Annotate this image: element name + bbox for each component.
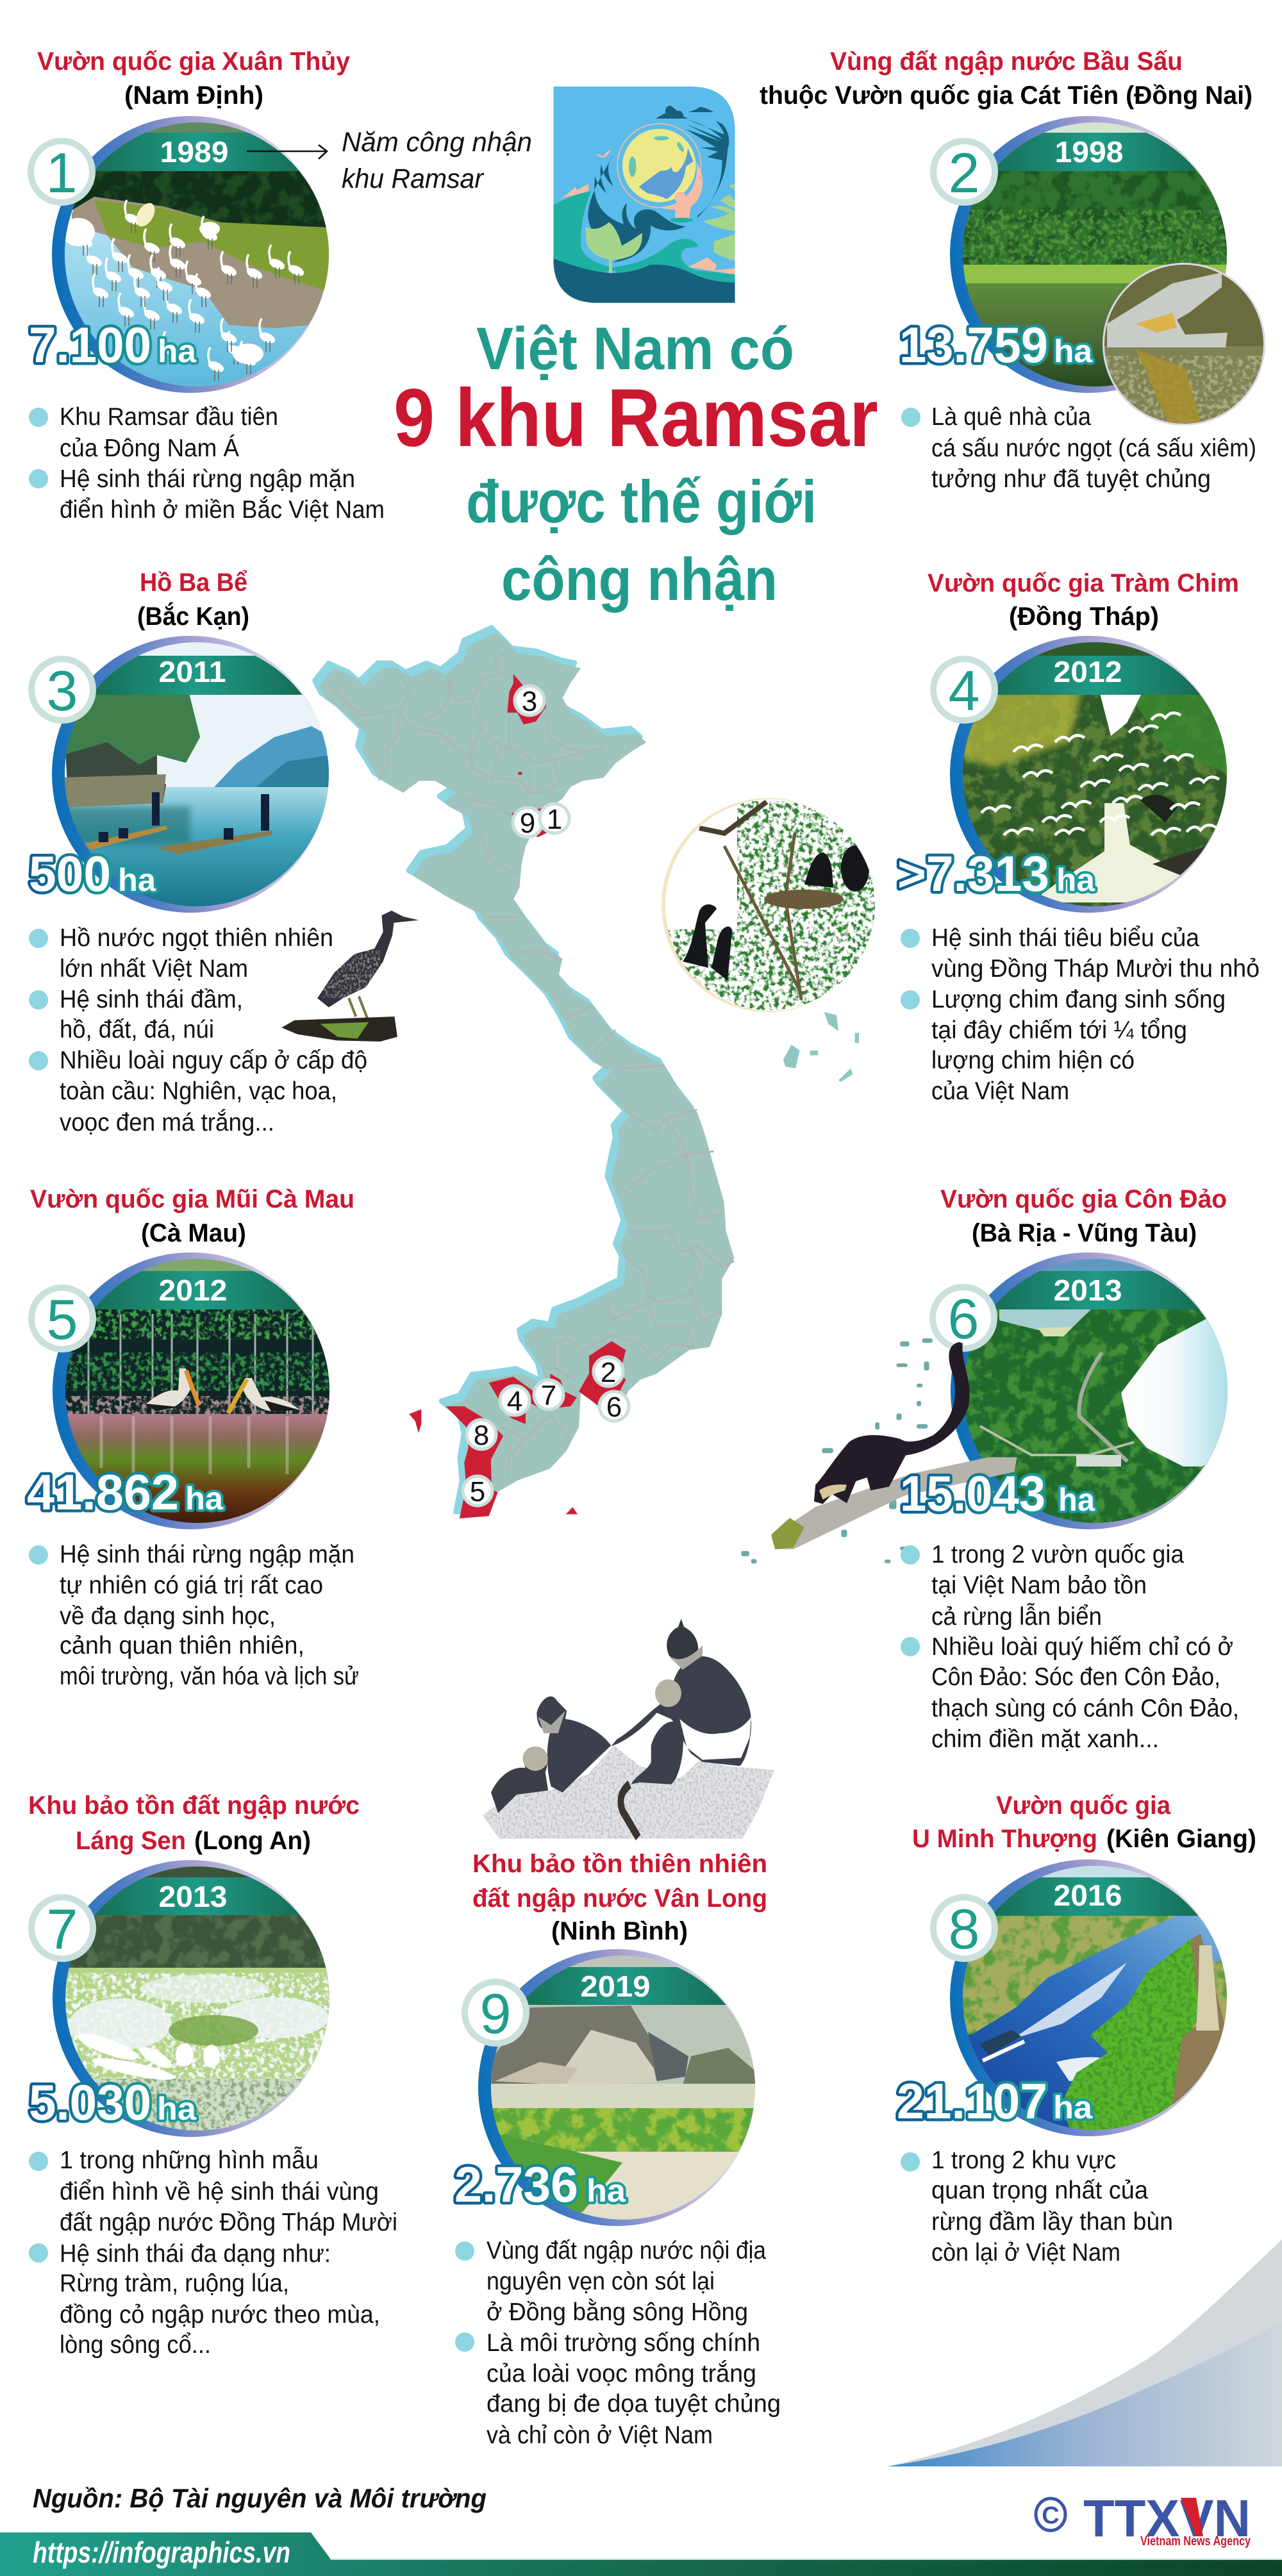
bullet list: cá sấu nước ngọt (cá sấu xiêm) — [931, 435, 1256, 462]
photo: cormorants nesting — [662, 798, 878, 1013]
bullet list: 1 trong 2 khu vực — [931, 2147, 1116, 2174]
map of Vietnam: 3 — [522, 686, 537, 717]
map of Vietnam: 6 — [606, 1392, 622, 1423]
map of Vietnam: 2 — [601, 1357, 616, 1388]
bullet list: 1 trong những hình mẫu — [60, 2147, 319, 2174]
panel: site 9 Vân Long: 2019 — [581, 1970, 650, 2003]
bullet list: Hồ nước ngọt thiên nhiên — [60, 924, 333, 952]
bullet list: Hệ sinh thái tiêu biểu của — [931, 924, 1199, 952]
site name — [137, 569, 249, 631]
main title: Việt Nam có — [476, 315, 794, 382]
site name: Vườn quốc gia Xuân Thủy — [37, 47, 351, 76]
area figure: ha — [1058, 1482, 1095, 1518]
area figure: ha — [157, 2091, 197, 2127]
site name: (Nam Định) — [124, 81, 263, 110]
site name — [37, 47, 351, 110]
bullet list: lượng chim hiện có — [931, 1047, 1135, 1074]
site name: (Cà Mau) — [141, 1219, 246, 1247]
map of Vietnam: 8 — [474, 1420, 489, 1451]
bullet list — [901, 1541, 1239, 1753]
number badge — [31, 1897, 93, 1961]
main title — [394, 315, 878, 613]
site name: Vườn quốc gia — [996, 1791, 1171, 1820]
area figure: ha — [1053, 2090, 1093, 2125]
bullet list — [901, 2147, 1173, 2266]
site name: (Đồng Tháp) — [1009, 602, 1159, 631]
bullet list: Rừng tràm, ruộng lúa, — [60, 2270, 289, 2297]
bullet list — [901, 403, 1256, 493]
main title: 9 khu Ramsar — [394, 372, 878, 464]
photo: birds over forest stream — [950, 636, 1236, 913]
bullet list: đất ngập nước Đồng Tháp Mười — [60, 2209, 397, 2236]
bullet list: voọc đen má trắng... — [60, 1109, 274, 1136]
panel: site 5 Mũi Cà Mau: 2012 — [159, 1274, 227, 1307]
bullet list: cảnh quan thiên nhiên, — [60, 1632, 304, 1659]
panel: site 2 Bầu Sấu — [760, 47, 1269, 493]
panel: site 1 Xuân Thủy: 1989 — [160, 135, 228, 169]
bullet list: ở Đồng bằng sông Hồng — [487, 2298, 748, 2326]
number badge: 6 — [948, 1287, 979, 1350]
bullet list — [29, 1541, 359, 1690]
bullet list: của Đông Nam Á — [60, 435, 239, 462]
source note: Nguồn: Bộ Tài nguyên và Môi trường — [33, 2483, 487, 2513]
number badge: 1 — [46, 141, 77, 204]
site name — [472, 1850, 767, 1945]
site name: thuộc Vườn quốc gia Cát Tiên (Đồng Nai) — [760, 81, 1253, 110]
panel: site 8 U Minh Thượng: 2016 — [1054, 1879, 1122, 1912]
bullet list: rừng đầm lầy than bùn — [931, 2208, 1173, 2236]
number badge: 3 — [47, 659, 78, 722]
bullet list: đang bị đe dọa tuyệt chủng — [487, 2390, 781, 2418]
area figure: ha — [587, 2173, 626, 2209]
bullet list: Hệ sinh thái rừng ngập mặn — [60, 1541, 354, 1568]
site name: Khu bảo tồn đất ngập nước — [28, 1791, 360, 1820]
photo: lake with boats — [52, 636, 338, 913]
footer bar with url — [0, 2532, 1282, 2576]
icon: white-rumped langurs on rock — [483, 1619, 774, 1839]
number badge: 2 — [949, 141, 979, 204]
map of Vietnam — [314, 627, 859, 1518]
map of Vietnam: 7 — [541, 1380, 556, 1411]
site name: (Ninh Bình) — [551, 1917, 688, 1945]
bullet list: Hệ sinh thái đa dạng như: — [60, 2240, 331, 2268]
map of Vietnam: 4 — [507, 1386, 522, 1417]
photo: forest and river — [950, 116, 1236, 393]
bullet list: Khu Ramsar đầu tiên — [60, 403, 278, 431]
number badge: 7 — [47, 1897, 78, 1961]
site name: (Long An) — [194, 1827, 311, 1855]
site name — [30, 1185, 354, 1247]
bullet list: lòng sông cổ... — [60, 2331, 211, 2359]
bullet list: Côn Đảo: Sóc đen Côn Đảo, — [931, 1663, 1220, 1691]
photo: canal with speedboat — [950, 1859, 1236, 2136]
bullet list: tưởng như đã tuyệt chủng — [931, 465, 1211, 493]
site name: Vườn quốc gia Côn Đảo — [940, 1185, 1227, 1213]
number badge — [31, 1288, 93, 1351]
logo: TTXVN agency: Vietnam News Agency — [1140, 2534, 1251, 2548]
number badge — [933, 1897, 995, 1961]
panel: site 4 Tràm Chim — [897, 569, 1260, 1105]
map of Vietnam: 9 — [520, 808, 535, 839]
bullet list — [29, 924, 367, 1136]
site name: Vùng đất ngập nước Bầu Sấu — [830, 47, 1183, 76]
panel: site 9 Vân Long — [454, 1850, 781, 2449]
panel: site 8 U Minh Thượng — [897, 1791, 1256, 2266]
bullet list: về đa dạng sinh học, — [60, 1602, 276, 1630]
bullet list: môi trường, văn hóa và lịch sử — [60, 1663, 359, 1690]
panel: site 6 Côn Đảo: 2013 — [1054, 1274, 1122, 1307]
bullet list: điển hình ở miền Bắc Việt Nam — [60, 496, 385, 524]
panel: site 1 Xuân Thủy — [29, 47, 532, 524]
bullet list: cả rừng lẫn biển — [931, 1603, 1102, 1631]
site name: Hồ Ba Bể — [140, 569, 247, 597]
bullet list: tự nhiên có giá trị rất cao — [60, 1572, 323, 1599]
area figure — [29, 845, 156, 902]
bullet list: tại Việt Nam bảo tồn — [931, 1572, 1147, 1599]
bullet list — [901, 924, 1260, 1105]
bullet list: Lượng chim đang sinh sống — [931, 986, 1226, 1013]
area figure: ha — [1056, 862, 1095, 898]
bullet list: Là quê nhà của — [931, 403, 1091, 431]
site name: (Bà Rịa - Vũng Tàu) — [972, 1219, 1197, 1247]
number badge — [465, 1982, 526, 2045]
map of Vietnam: 5 — [470, 1476, 485, 1508]
bullet list: Hệ sinh thái rừng ngập mặn — [60, 465, 355, 493]
number badge: 8 — [949, 1897, 979, 1961]
number badge — [933, 659, 995, 722]
bullet list — [29, 2147, 397, 2359]
area figure: >7.313 — [897, 845, 1049, 902]
bullet list: nguyên vẹn còn sót lại — [487, 2268, 715, 2295]
bullet list: tại đây chiếm tới ¼ tổng — [931, 1017, 1187, 1044]
bullet list: Hệ sinh thái đầm, — [60, 986, 243, 1013]
bullet list: Nhiều loài nguy cấp ở cấp độ — [60, 1047, 367, 1074]
area figure: ha — [158, 333, 197, 369]
bullet list: Nhiều loài quý hiếm chỉ có ở — [931, 1633, 1233, 1661]
main title: được thế giới — [466, 468, 817, 535]
site name: đất ngập nước Vân Long — [472, 1884, 767, 1913]
area figure: 2.736 — [454, 2156, 578, 2213]
panel: site 3 Hồ Ba Bể: 2011 — [159, 655, 226, 688]
number badge: 5 — [47, 1288, 78, 1351]
main title: công nhận — [501, 545, 778, 613]
photo: limestone mountains and marsh — [478, 1949, 764, 2226]
number badge — [31, 141, 92, 204]
panel: site 7 Láng Sen: 2013 — [159, 1880, 227, 1913]
photo: mangrove with storks — [53, 1252, 338, 1529]
panel: site 2 Bầu Sấu: 1998 — [1055, 135, 1123, 169]
site name: Vườn quốc gia Tràm Chim — [928, 569, 1239, 597]
bullet list: còn lại ở Việt Nam — [931, 2239, 1120, 2266]
bullet list: quan trọng nhất của — [931, 2177, 1148, 2204]
number badge: 4 — [949, 659, 979, 722]
site name — [928, 569, 1239, 631]
bullet list: thạch sùng có cánh Côn Đảo, — [931, 1695, 1239, 1722]
photo: island aerial view — [951, 1252, 1236, 1529]
bullet list: đồng cỏ ngập nước theo mùa, — [60, 2301, 380, 2329]
bullet list: hồ, đất, đá, núi — [60, 1016, 214, 1043]
site name — [760, 47, 1253, 110]
site name — [940, 1185, 1227, 1247]
area figure: 5.030 — [29, 2074, 151, 2131]
logo: TTXVN agency: TTXVN — [1083, 2489, 1251, 2548]
panel: site 3 Hồ Ba Bể — [29, 569, 419, 1136]
bullet list: và chỉ còn ở Việt Nam — [487, 2422, 713, 2449]
area figure: ha — [118, 862, 156, 898]
area figure: 41.862 — [27, 1464, 179, 1520]
icon: Ramsar logo — [553, 87, 735, 303]
photo: egrets on wetland — [52, 116, 338, 393]
area figure: 15.043 — [900, 1465, 1045, 1522]
bullet list: Vùng đất ngập nước nội địa — [487, 2237, 766, 2264]
panel: site 5 Mũi Cà Mau — [27, 1185, 359, 1690]
annotation: year of recognition with arrow — [247, 127, 532, 194]
area figure: ha — [1054, 333, 1093, 369]
panel: site 6 Côn Đảo — [741, 1185, 1239, 1753]
area figure: 500 — [29, 845, 111, 902]
annotation: year of recognition with arrow: Năm công nhận — [342, 127, 532, 158]
bullet list: chim điền mặt xanh... — [931, 1725, 1159, 1753]
site name: U Minh Thượng — [912, 1825, 1097, 1853]
number badge: 9 — [480, 1982, 511, 2045]
site name: Láng Sen — [76, 1827, 186, 1855]
site name: (Bắc Kạn) — [137, 601, 249, 631]
area figure: 7.100 — [29, 317, 151, 373]
logo: TTXVN agency: C — [1042, 2502, 1060, 2529]
icon: heron on log — [281, 911, 419, 1042]
number badge — [933, 141, 995, 204]
bullet list: của loài voọc mông trắng — [487, 2360, 756, 2388]
panel: site 7 Láng Sen — [28, 1791, 397, 2359]
bullet list: điển hình về hệ sinh thái vùng — [60, 2178, 379, 2206]
corner decoration: grey and blue swoosh — [887, 2239, 1282, 2466]
bullet list: toàn cầu: Nghiên, vạc hoa, — [60, 1077, 337, 1105]
number badge — [933, 1287, 994, 1350]
site name — [912, 1791, 1256, 1853]
photo: white egrets on wetland — [53, 1860, 338, 2137]
bullet list — [29, 403, 385, 524]
panel: site 4 Tràm Chim: 2012 — [1054, 655, 1122, 688]
map of Vietnam: 1 — [547, 804, 562, 835]
icon: black squirrel on branch with islands — [741, 1338, 1017, 1563]
bullet list: vùng Đồng Tháp Mười thu nhỏ — [931, 955, 1260, 983]
site name: Vườn quốc gia Mũi Cà Mau — [30, 1185, 354, 1213]
area figure: 21.107 — [897, 2073, 1047, 2129]
photo: crocodile inset — [1103, 263, 1269, 433]
area figure: ha — [185, 1481, 224, 1517]
bullet list: Là môi trường sống chính — [487, 2329, 760, 2357]
bullet list: của Việt Nam — [931, 1077, 1069, 1105]
bullet list: lớn nhất Việt Nam — [60, 955, 248, 983]
annotation: year of recognition with arrow: khu Ramsar — [342, 163, 485, 194]
number badge — [31, 659, 93, 722]
site name: Khu bảo tồn thiên nhiên — [472, 1850, 767, 1878]
area figure: 13.759 — [899, 317, 1048, 373]
footer bar with url: https://infographics.vn — [33, 2536, 290, 2569]
site name: (Kiên Giang) — [1106, 1825, 1256, 1853]
site name — [28, 1791, 360, 1855]
bullet list: 1 trong 2 vườn quốc gia — [931, 1541, 1184, 1568]
bullet list — [455, 2237, 781, 2449]
